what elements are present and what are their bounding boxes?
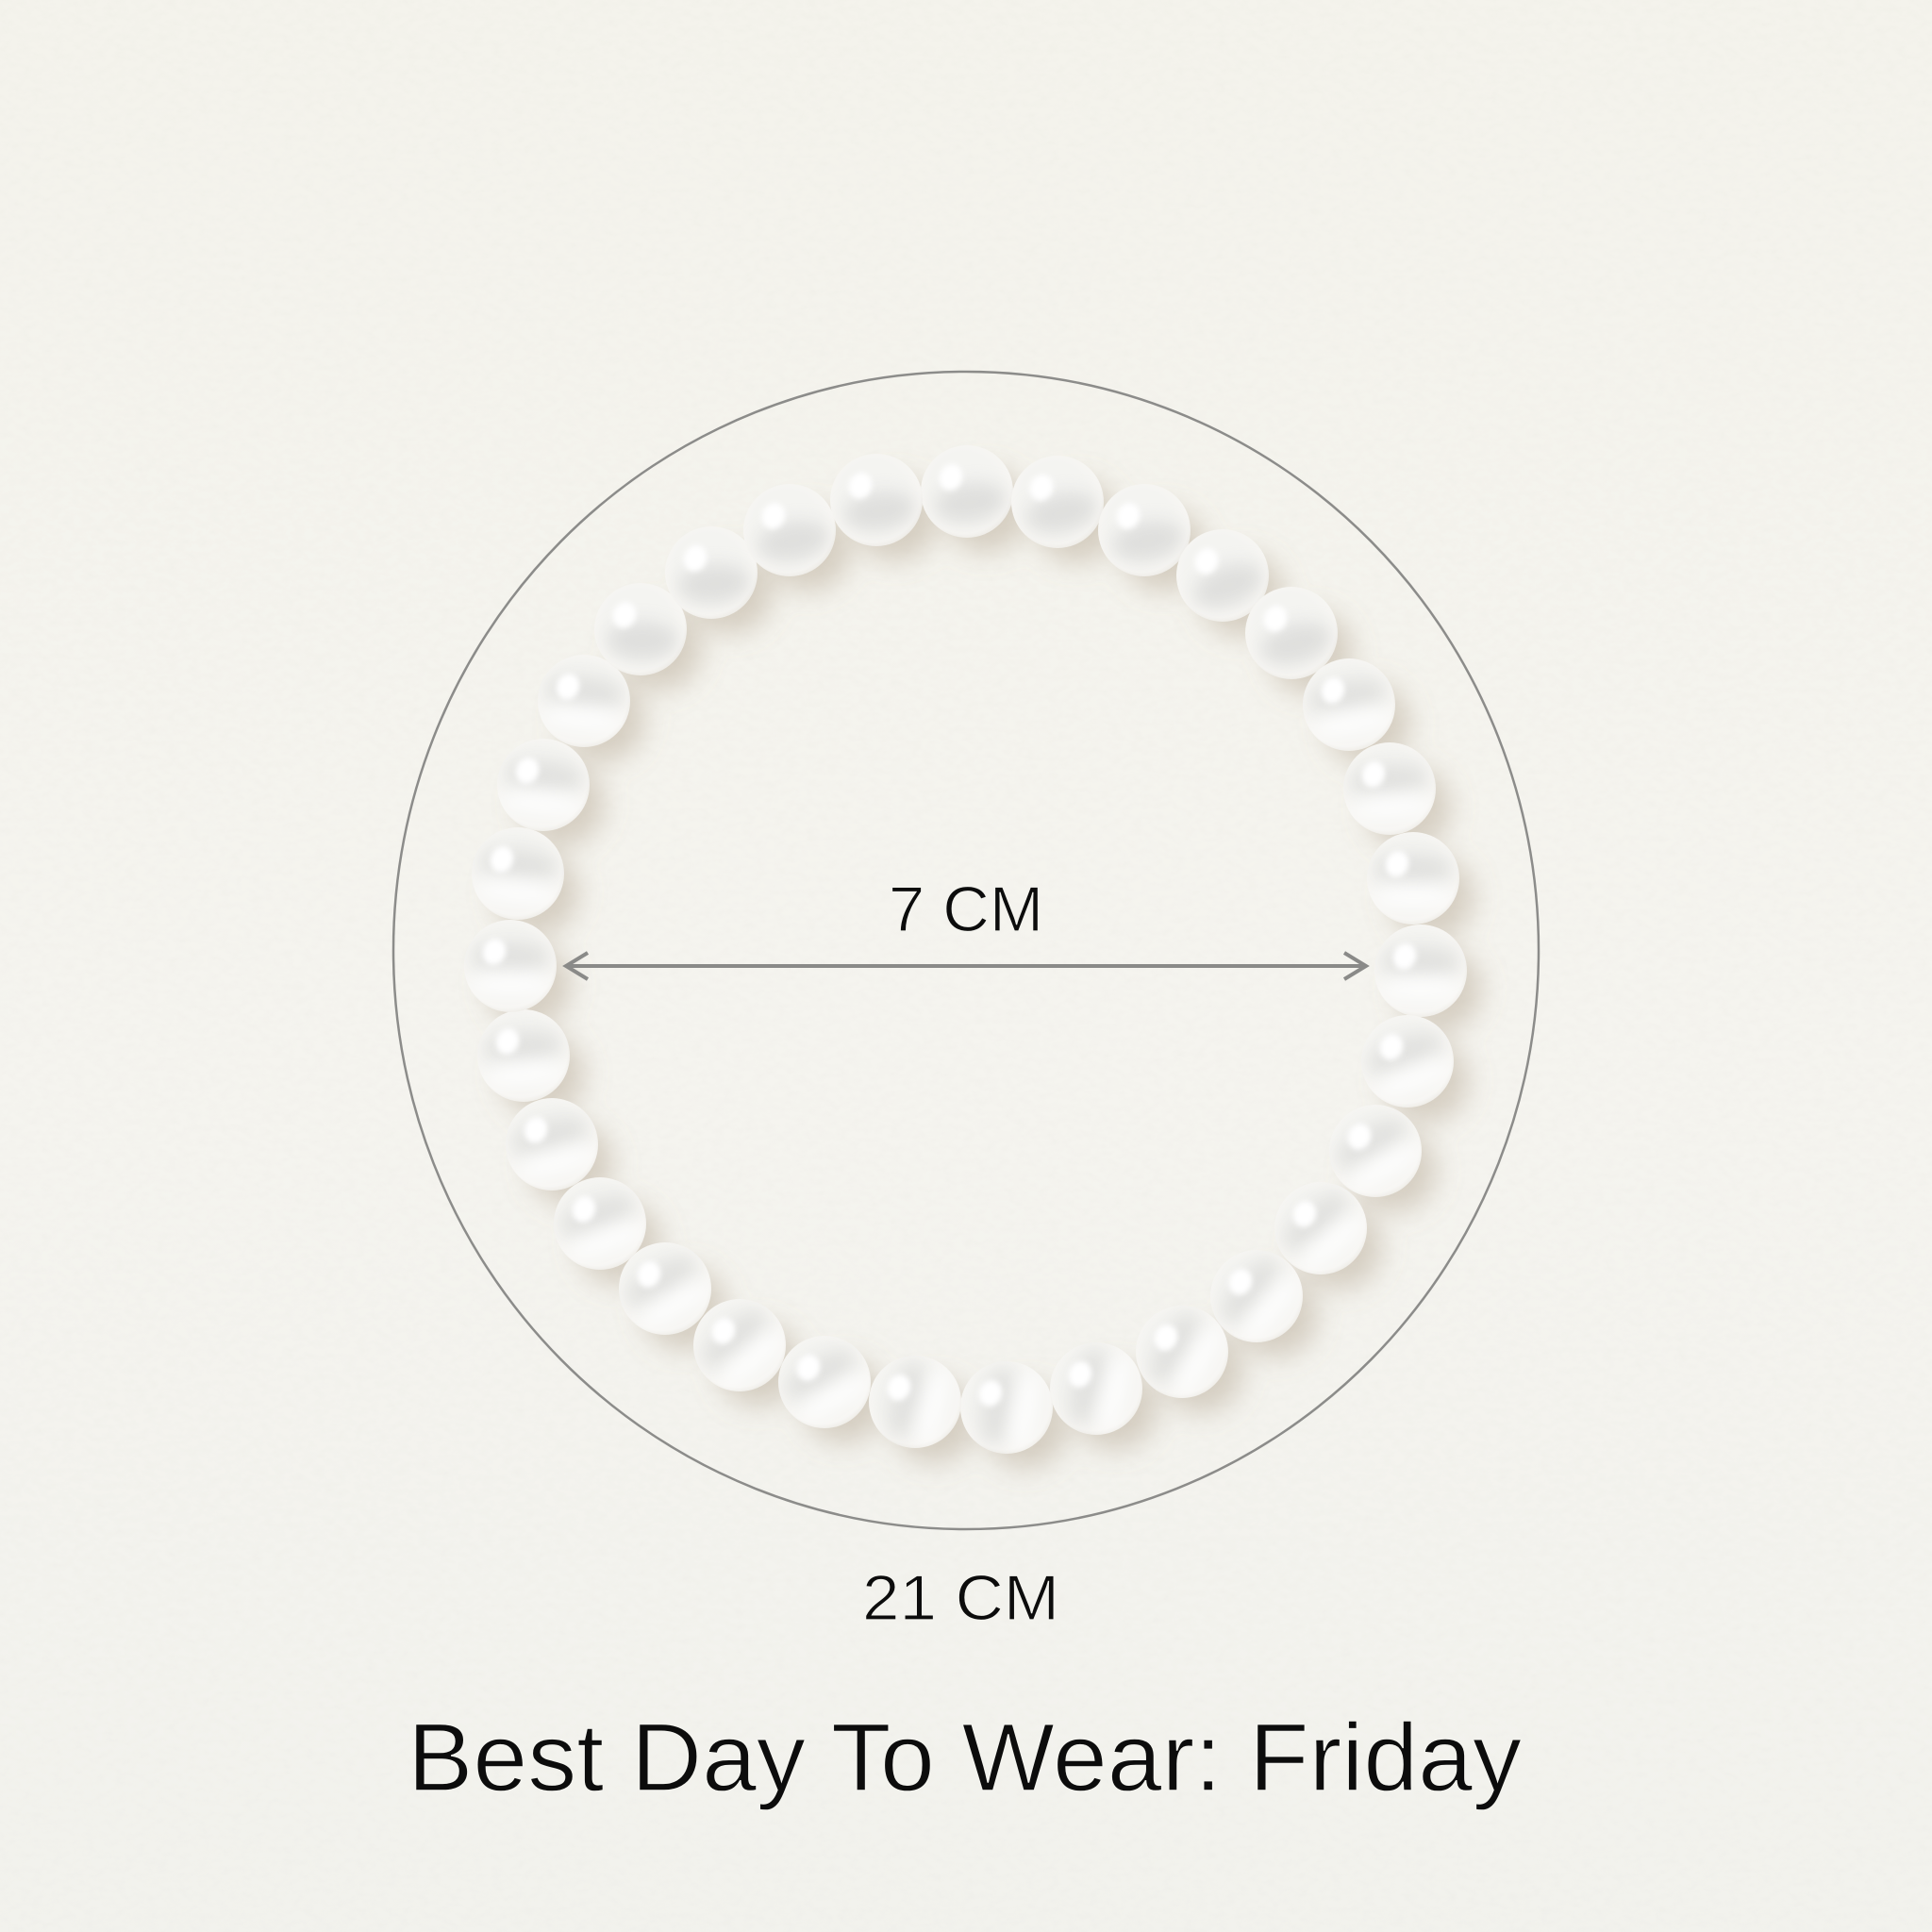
bead 6 [1303,658,1395,751]
bracelet shadow [487,468,1482,1469]
bead 14 [1136,1304,1230,1404]
bead 28 [594,583,687,675]
bead 24 [464,920,557,1012]
bead 4 [1176,529,1269,622]
bead 21 [553,1177,650,1270]
bead 2 [1011,456,1104,548]
bead 19 [692,1299,791,1396]
bead 7 [1343,742,1436,835]
bead 11 [1327,1105,1427,1199]
bead 26 [497,739,590,831]
bead 1 [921,445,1013,538]
measurement circle: 21 cm circumference [393,372,1539,1529]
bead 12 [1274,1182,1373,1279]
bead 15 [1050,1342,1142,1437]
bead 3 [1098,484,1191,576]
bead 10 [1360,1015,1457,1108]
label: 7 CM inner diameter: 7 CM [889,874,1043,945]
bead 13 [1210,1249,1307,1348]
bead 25 [472,827,564,920]
bracelet of white cat's eye beads [464,445,1467,1454]
bead 20 [617,1242,717,1337]
title: best day to wear: Best Day To Wear: Friday [408,1704,1522,1811]
bead 23 [477,1009,570,1102]
bead 30 [743,484,836,576]
bead 8 [1367,832,1459,924]
label: 21 CM circumference: 21 CM [862,1562,1059,1634]
bead 17 [869,1356,961,1450]
bead 9 [1374,924,1467,1017]
bead 22 [506,1098,600,1191]
bead 29 [665,526,758,619]
bead 27 [538,655,630,747]
bead 31 [830,454,923,546]
bead 16 [960,1361,1053,1454]
bead 18 [776,1336,876,1430]
arrow: double-headed diameter measure [566,953,1366,979]
bead 5 [1245,587,1338,679]
